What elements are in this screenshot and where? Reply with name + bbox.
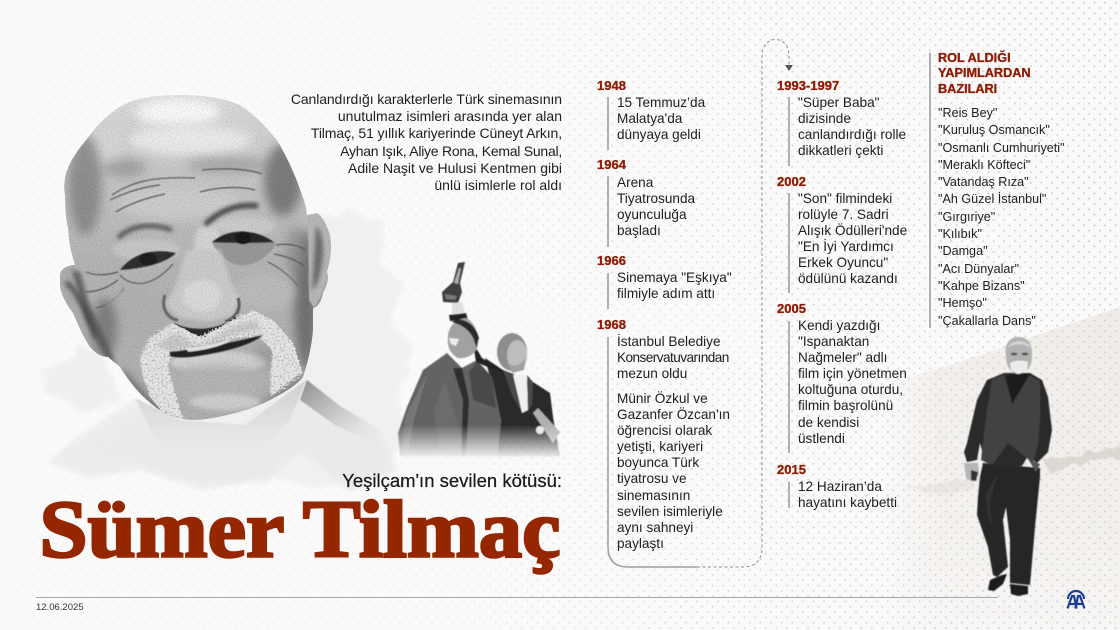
entry 2002: ödülünü kazandı: [798, 271, 898, 286]
entry 2005: film için yönetmen: [798, 366, 907, 381]
entry 2005: koltuğuna oturdu,: [798, 382, 903, 397]
entry 1948: 1948: [597, 78, 626, 93]
portrait: main photo of Sümer Tilmaç: [52, 95, 1053, 597]
eye sockets: [113, 239, 181, 261]
eyes: [120, 251, 176, 270]
temples: [68, 135, 102, 235]
entry 1964: başladı: [617, 223, 661, 238]
intro text: Tilmaç, 51 yıllık kariyerinde Cüneyt Arkın,: [311, 125, 562, 141]
entry 2002: Alışık Ödülleri'nde: [798, 223, 907, 238]
entry 1993-1997: dizisinde: [798, 111, 851, 126]
entry 1993-1997: canlandırdığı rolle: [798, 127, 906, 142]
entry 2002: rolüyle 7. Sadri: [798, 207, 889, 222]
wrinkles: [86, 169, 306, 308]
entry 1968: paylaştı: [617, 536, 664, 551]
intro text: Adile Naşit ve Hulusi Kentmen gibi: [348, 160, 562, 176]
brows: [118, 226, 172, 238]
timeline column two: [777, 78, 907, 510]
film titles: "Osmanlı Cumhuriyeti": [938, 141, 1065, 155]
entry 1966: 1966: [597, 253, 626, 268]
entry 1964: [597, 157, 696, 247]
entry 1968: yetişti, kariyeri: [617, 439, 703, 454]
beard and moustache: [140, 310, 302, 418]
list heading: YAPIMLARDAN: [938, 66, 1031, 80]
entry 1993-1997: "Süper Baba": [798, 95, 879, 110]
left ear: [64, 266, 74, 279]
entry 2002: Erkek Oyuncu": [798, 255, 888, 270]
entry 1948: 15 Temmuz’da: [617, 95, 705, 110]
icon: AA logo: [1066, 590, 1086, 609]
hand: [964, 463, 979, 482]
neck and shirt fading out: [48, 380, 398, 492]
photo: two men with a trophy: [397, 261, 560, 457]
film titles: "Gırgıriye": [938, 210, 995, 224]
under-nose shadow: [172, 316, 238, 340]
entry 2005: de kendisi: [798, 415, 859, 430]
right side of face and ear: [294, 230, 318, 370]
film titles: "Kuruluş Osmancık": [938, 123, 1050, 137]
intro text: ünlü isimlerle rol aldı: [434, 177, 562, 193]
entry 1948: Malatya'da: [617, 111, 682, 126]
entry 1968: [597, 317, 730, 551]
entry 1968: sevilen isimleriyle: [617, 504, 723, 519]
entry 1966: Sinemaya "Eşkıya": [617, 270, 732, 285]
entry 1966: [597, 253, 732, 309]
intro text: Canlandırdığı karakterlerle Türk sinemasının: [291, 91, 562, 107]
entry 1964: oyunculuğa: [617, 207, 687, 222]
entry 2005: 2005: [777, 301, 806, 316]
head with shading and facial features: [60, 95, 331, 420]
entry 1968: İstanbul Belediye: [617, 334, 721, 349]
entry 1968: sinemasının: [617, 488, 690, 503]
entry 1968: Konservatuvarından: [617, 350, 729, 365]
forehead centre: [124, 190, 235, 220]
film titles: "Hemşo": [938, 296, 987, 310]
film titles: "Acı Dünyalar": [938, 262, 1019, 276]
chin and lower lip: [170, 351, 266, 373]
timeline column one: [597, 78, 732, 551]
entry 1964: 1964: [597, 157, 626, 172]
entry 2005: üstlendi: [798, 431, 845, 446]
panel: film list: [929, 50, 1065, 328]
entry 2005: Kendi yazdığı: [798, 318, 880, 333]
entry 2002: 2002: [777, 174, 806, 189]
entry 2015: hayatını kaybetti: [798, 495, 897, 510]
entry 1964: Tiyatrosunda: [617, 191, 695, 206]
film titles: "Çakallarla Dans": [938, 314, 1036, 328]
film titles: "Meraklı Köfteci": [938, 158, 1030, 172]
subtitle: Yeşilçam'ın sevilen kötüsü:: [342, 470, 562, 491]
entry 1968: tiyatrosu ve: [617, 471, 687, 486]
nose: [165, 250, 240, 322]
list heading: BAZILARI: [938, 82, 997, 96]
entry 2005: [777, 301, 907, 453]
trousers: [977, 463, 1040, 585]
entry 1993-1997: [777, 78, 906, 166]
entry 2005: "Ispanaktan: [798, 334, 869, 349]
intro text: Ayhan Işık, Aliye Rona, Kemal Sunal,: [340, 143, 562, 159]
film titles: "Vatandaş Rıza": [938, 175, 1029, 189]
entry 1948: [597, 78, 706, 150]
entry 2005: Nağmeler" adlı: [798, 350, 887, 365]
entry 2002: [777, 174, 907, 293]
entry 1993-1997: 1993-1997: [777, 78, 839, 93]
sweater and arms: [964, 373, 1052, 468]
second man: [485, 358, 560, 457]
photo: standing figure in dark suit: [964, 337, 1052, 596]
footer rule: [36, 597, 998, 598]
entry 2005: filmin başrolünü: [798, 398, 893, 413]
entry 1968: mezun oldu: [617, 366, 687, 381]
film titles: "Reis Bey": [938, 106, 997, 120]
trophy: [442, 262, 465, 303]
entry 1968: Gazanfer Özcan'ın: [617, 407, 730, 422]
entry 2015: [777, 462, 897, 510]
entry 1993-1997: dikkatleri çekti: [798, 143, 883, 158]
head: [1006, 337, 1032, 374]
entry 2015: 12 Haziran’da: [798, 479, 882, 494]
entry 1968: boyunca Türk: [617, 455, 699, 470]
entry 1968: Münir Özkul ve: [617, 391, 708, 406]
list heading: [938, 50, 1031, 96]
title: Sümer Tilmaç: [40, 484, 560, 574]
date: 12.06.2025: [36, 602, 84, 613]
mouth: [170, 335, 263, 358]
entry 1948: dünyaya geldi: [617, 127, 701, 142]
entry 2002: "En İyi Yardımcı: [798, 239, 894, 254]
film titles: "Damga": [938, 244, 988, 258]
entry 1968: öğrencisi olarak: [617, 423, 712, 438]
intro text: unutulmaz isimleri arasında yer alan: [338, 108, 562, 124]
entry 1966: filmiyle adım attı: [617, 286, 715, 301]
entry 1968: 1968: [597, 317, 626, 332]
list heading: ROL ALDIĞI: [938, 50, 1011, 64]
cheeks: [104, 283, 142, 306]
skull highlights: [136, 98, 220, 126]
film titles: "Ah Güzel İstanbul": [938, 192, 1046, 206]
vest: [981, 375, 1040, 465]
first man: [398, 353, 501, 457]
entry 2015: 2015: [777, 462, 806, 477]
entry 1964: Arena: [617, 175, 653, 190]
entry 1968: aynı sahneyi: [617, 520, 693, 535]
entry 2002: "Son" filmindeki: [798, 191, 892, 206]
intro text: [291, 91, 562, 193]
shoes: [988, 574, 1007, 591]
film titles: "Kahpe Bizans": [938, 279, 1025, 293]
film titles: [938, 106, 1065, 328]
film titles: "Kılıbık": [938, 227, 982, 241]
